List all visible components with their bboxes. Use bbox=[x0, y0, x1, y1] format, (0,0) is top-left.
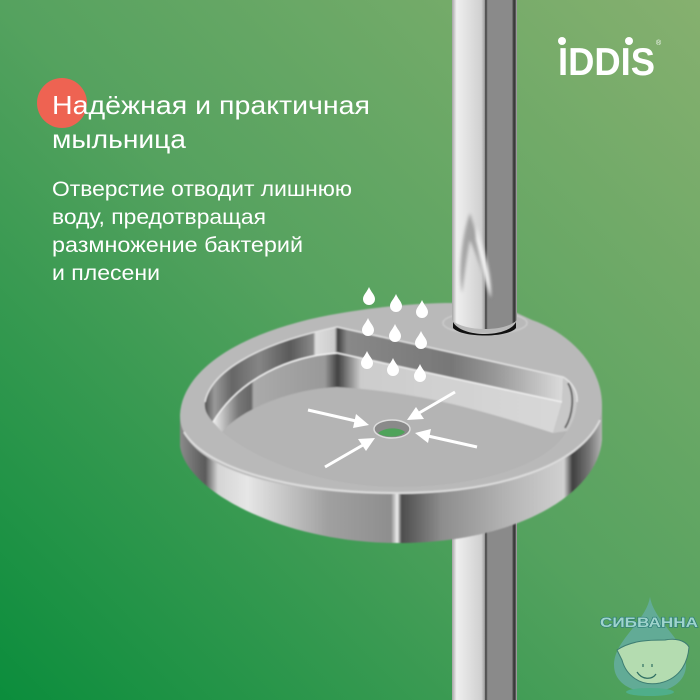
logo: iddis: ® bbox=[656, 39, 662, 47]
accent circle bbox=[37, 78, 87, 128]
left lower wall bbox=[213, 353, 337, 432]
description: воду, предотвращая bbox=[52, 206, 266, 229]
logo: iddis: IDDIS bbox=[558, 41, 655, 84]
back lower wall bbox=[337, 353, 562, 433]
bathtub face bbox=[637, 664, 656, 678]
water drops bbox=[361, 287, 428, 382]
back upper wall bbox=[337, 327, 563, 402]
bathtub bbox=[617, 639, 689, 684]
description: и плесени bbox=[52, 262, 160, 285]
water drop bbox=[614, 597, 686, 692]
right wall bbox=[553, 377, 577, 433]
watermark: sibvanna bbox=[600, 597, 698, 696]
upper rail pole bbox=[452, 0, 517, 336]
brand text: СИБВАННА bbox=[600, 614, 698, 630]
soap dish bbox=[180, 303, 602, 543]
shadow under tub bbox=[626, 688, 674, 696]
heading: Надёжная и практичная bbox=[52, 90, 370, 120]
lower rail pole bbox=[452, 520, 517, 700]
arrows to drain bbox=[308, 392, 477, 467]
front rim highlight bbox=[184, 420, 600, 493]
dish outer side bbox=[180, 405, 602, 543]
drain hole bbox=[374, 420, 410, 438]
left upper wall bbox=[205, 327, 337, 422]
pole collar ring bbox=[443, 312, 527, 334]
description bbox=[52, 178, 352, 285]
rim highlights bbox=[205, 327, 577, 402]
basin floor bbox=[205, 350, 567, 487]
heading line 2: мыльница bbox=[52, 124, 187, 154]
dish top surface bbox=[180, 303, 602, 494]
description: Отверстие отводит лишнюю bbox=[52, 178, 352, 201]
description: размножение бактерий bbox=[52, 234, 303, 257]
